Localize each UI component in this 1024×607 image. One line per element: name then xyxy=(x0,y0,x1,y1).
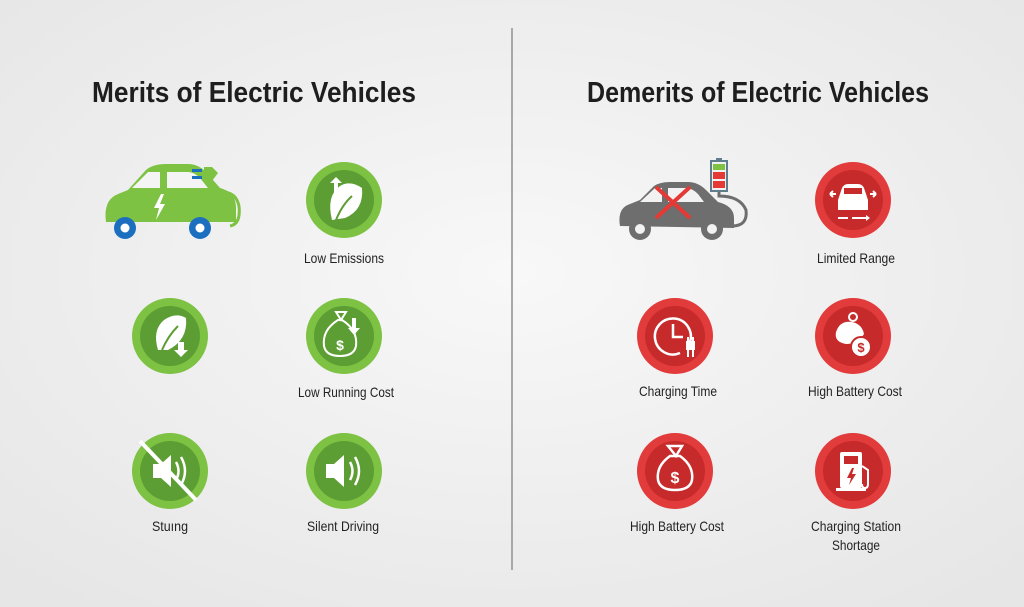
icon: low running cost xyxy=(306,298,382,374)
label: charging station shortage: Charging Station xyxy=(811,518,901,534)
label: charging station shortage: Shortage xyxy=(832,537,880,553)
label: limited range: Limited Range xyxy=(817,250,895,266)
label: low emissions: Low Emissions xyxy=(304,250,384,266)
title: demerits: Demerits of Electric Vehicles xyxy=(587,77,929,109)
icon: leaf down xyxy=(132,298,208,374)
label: high battery cost: High Battery Cost xyxy=(808,383,902,399)
label: silent driving: Silent Driving xyxy=(307,518,379,534)
icon: low emissions xyxy=(306,162,382,238)
label: low running cost: Low Running Cost xyxy=(298,384,394,400)
title: merits: Merits of Electric Vehicles xyxy=(92,77,416,109)
label: charging station shortage xyxy=(811,518,901,553)
icon: money bag xyxy=(637,433,713,509)
label: charging time: Charging Time xyxy=(639,383,717,399)
icon: silent driving xyxy=(306,433,382,509)
icon: charging time xyxy=(637,298,713,374)
icon: silenced speaker xyxy=(132,433,208,509)
label: stung: Stuıng xyxy=(152,518,188,534)
icon: green electric car xyxy=(106,164,239,239)
icon: charging station xyxy=(815,433,891,509)
icon: grey car with battery xyxy=(619,158,746,240)
icon: money bag: $ xyxy=(671,470,680,487)
icon: high battery cost (tag): $ xyxy=(857,340,865,355)
label: high battery cost 2: High Battery Cost xyxy=(630,518,724,534)
icon: limited range xyxy=(815,162,891,238)
icon: low running cost: $ xyxy=(336,337,344,353)
icon: high battery cost (tag) xyxy=(815,298,891,374)
